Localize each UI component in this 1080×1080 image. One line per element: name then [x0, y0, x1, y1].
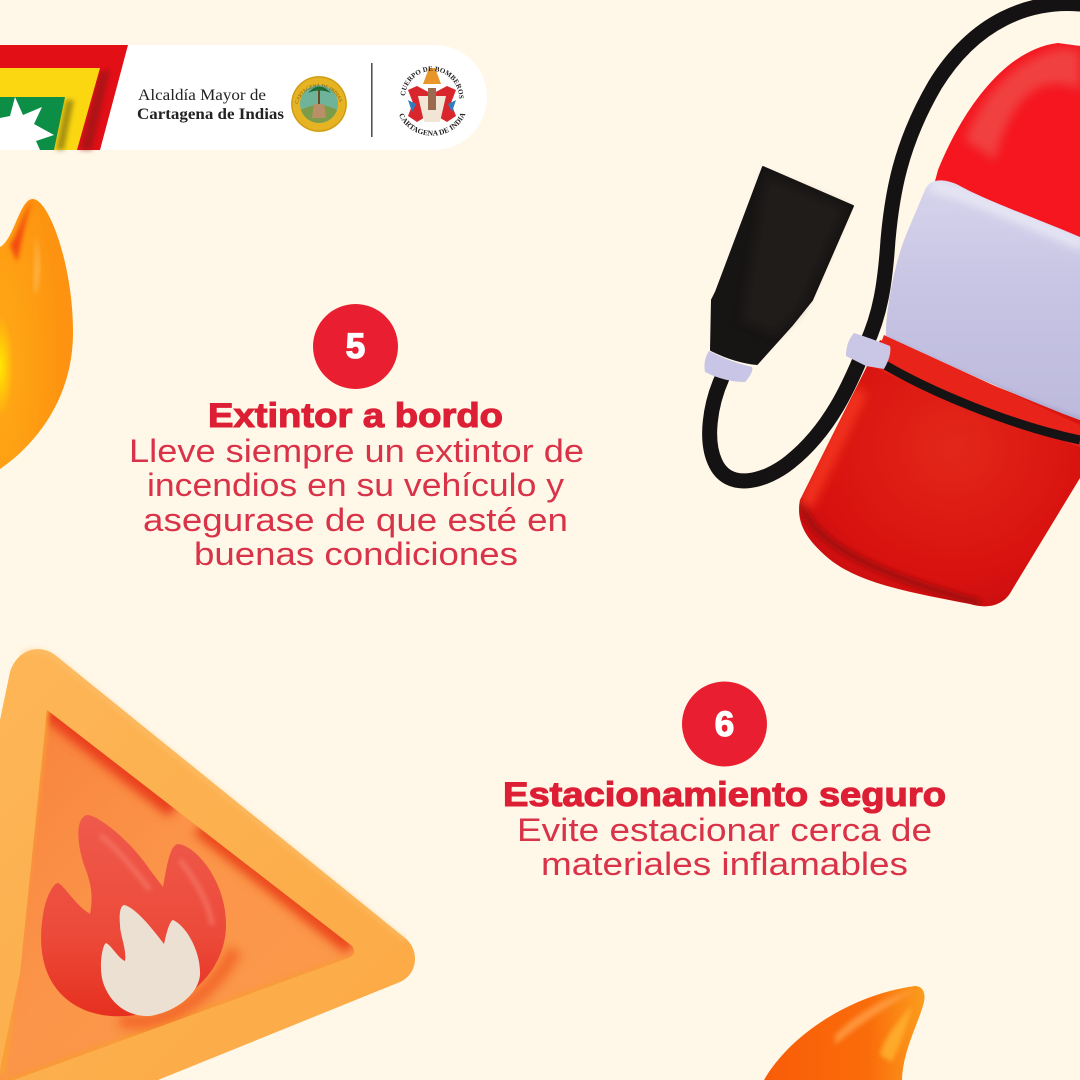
heading: Extintor a bordo	[208, 397, 503, 435]
lower red body	[799, 340, 1080, 606]
triangle frame	[0, 649, 415, 1080]
description	[129, 433, 584, 572]
flame: bottom edge	[764, 986, 925, 1080]
number badge	[682, 682, 767, 766]
white pill	[0, 45, 487, 150]
flame: left edge	[0, 199, 73, 469]
organisation name	[137, 87, 284, 123]
number badge	[313, 304, 398, 389]
number badge: 6	[715, 705, 734, 744]
seal of Cartagena	[291, 76, 347, 132]
description: Evite estacionar cerca de	[517, 812, 932, 848]
flag emblem	[0, 45, 128, 150]
hose clip	[846, 333, 890, 369]
description: asegurase de que esté en	[143, 502, 568, 538]
description: materiales inflamables	[541, 846, 908, 882]
item 6	[503, 682, 946, 882]
organisation name: Alcaldía Mayor de	[138, 87, 266, 104]
firefighters emblem: CUERPO DE BOMBEROS	[400, 66, 464, 98]
description: incendios en su vehículo y	[147, 467, 564, 503]
divider	[371, 63, 373, 137]
header logo bar	[0, 45, 487, 154]
description	[517, 812, 932, 882]
nozzle ring	[704, 351, 752, 382]
firefighters emblem	[400, 66, 466, 136]
hose	[710, 4, 1080, 481]
nozzle	[711, 167, 853, 364]
item 5	[129, 304, 584, 572]
fire extinguisher illustration	[704, 4, 1080, 606]
strap	[880, 362, 1080, 440]
silver band	[886, 180, 1080, 422]
red flame	[41, 815, 226, 1016]
triangle inset	[0, 710, 354, 1080]
white inner flame	[101, 905, 200, 1016]
warning triangle illustration	[0, 649, 415, 1080]
cylinder dome	[935, 43, 1080, 237]
number badge: 5	[346, 327, 365, 366]
description: buenas condiciones	[194, 536, 518, 572]
seal of Cartagena: CARTAGENA DE INDIAS	[295, 84, 342, 104]
description: Lleve siempre un extintor de	[129, 433, 584, 469]
heading: Estacionamiento seguro	[503, 776, 946, 814]
red collar	[872, 335, 1080, 447]
organisation name: Cartagena de Indias	[137, 106, 284, 123]
